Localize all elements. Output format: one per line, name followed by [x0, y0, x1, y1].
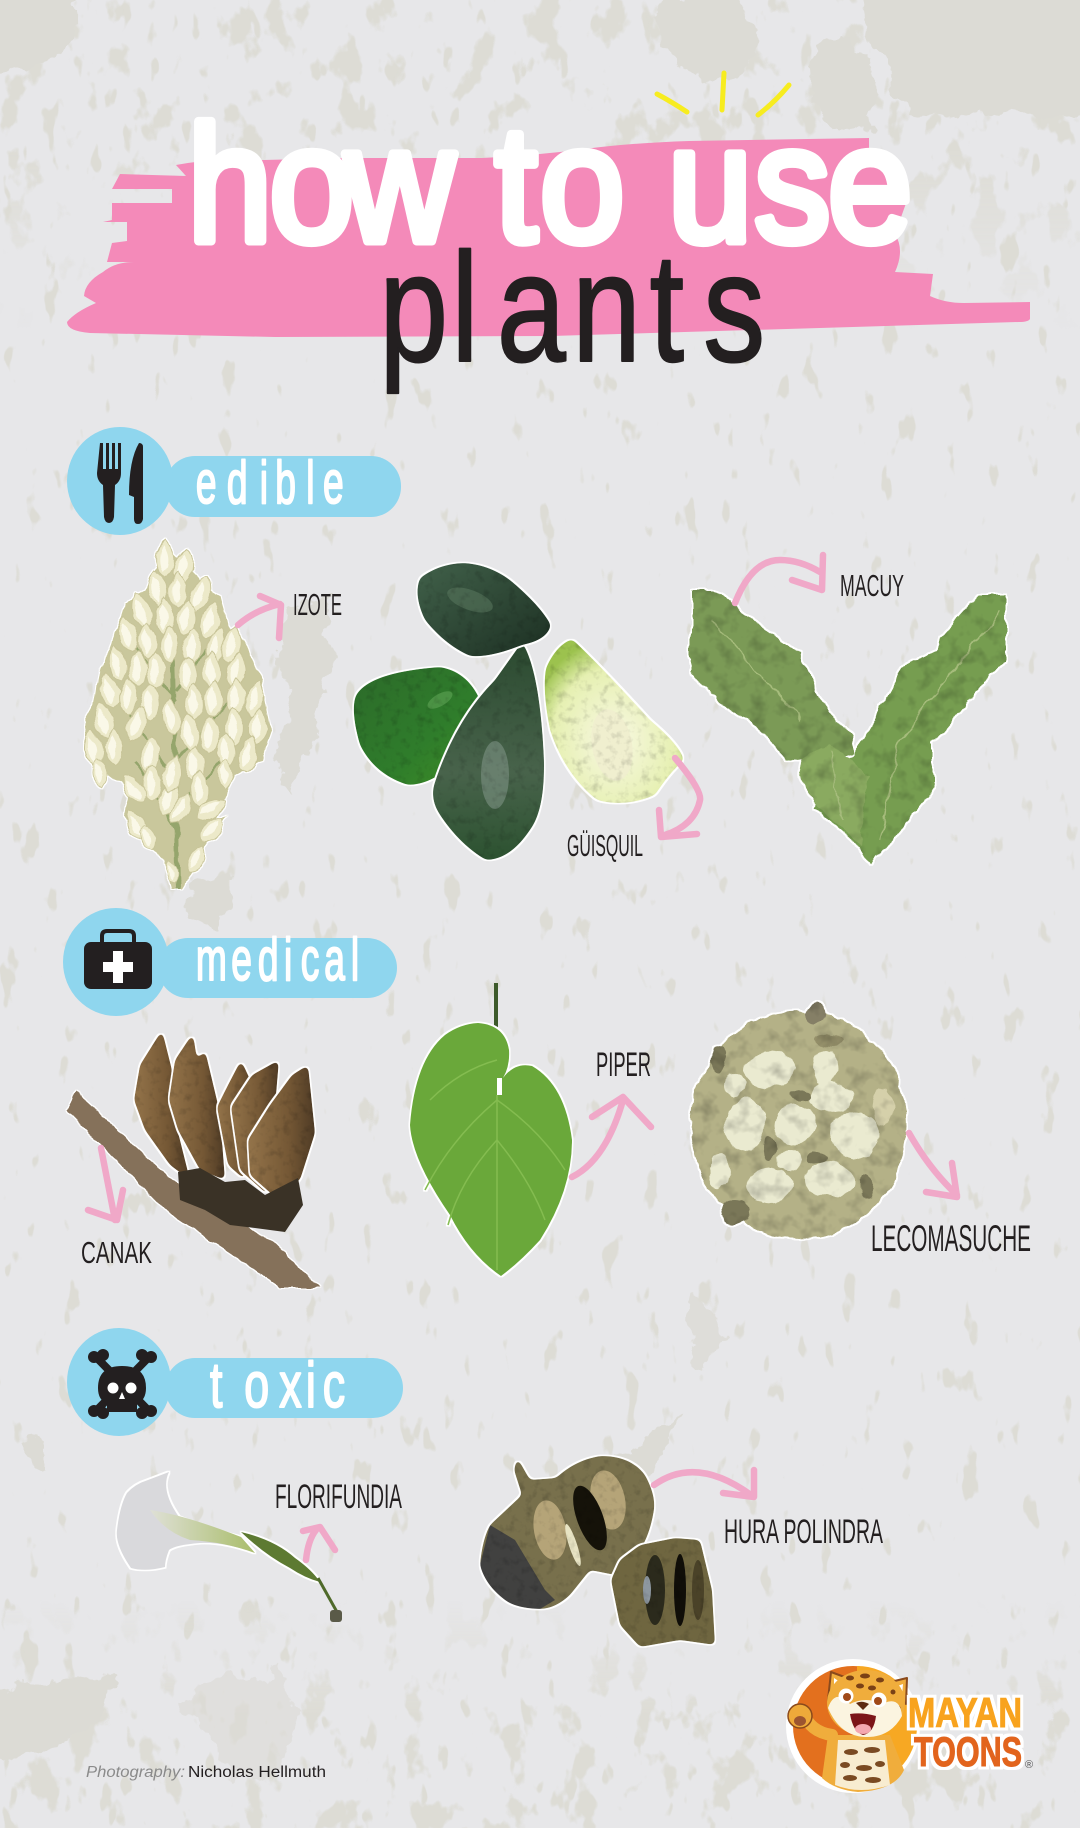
arrow: hura polindra	[654, 1470, 754, 1497]
branch	[67, 1092, 320, 1288]
white trumpet	[117, 1472, 255, 1570]
plant: piper leaf	[410, 983, 572, 1276]
trademark mark: ®	[1025, 1759, 1033, 1771]
title	[67, 73, 1030, 394]
section badge: toxic	[67, 1328, 403, 1436]
centre leaf	[799, 743, 868, 847]
yellow sparkle lines	[657, 73, 789, 115]
left leaf	[691, 590, 854, 762]
icon: fork and knife	[97, 443, 143, 524]
arrow: canak	[88, 1148, 123, 1220]
right leaf	[813, 595, 1006, 866]
long chayote	[433, 642, 544, 860]
photo credit: Nicholas Hellmuth	[188, 1764, 326, 1781]
plant: macuy leaves	[691, 590, 1006, 866]
arrow: guisquil	[659, 758, 700, 837]
plant: florifundia flower	[117, 1472, 342, 1622]
section badge: edible	[67, 427, 401, 535]
arrow: izote	[238, 596, 281, 638]
label: hura polindra: HURA POLINDRA	[724, 1513, 883, 1551]
logo wordmark: TOONS	[914, 1728, 1022, 1775]
stem	[318, 1578, 337, 1612]
leaf notch	[497, 1078, 502, 1095]
logo: mayan toons	[786, 1659, 1033, 1793]
title word: plants: plants	[379, 221, 765, 394]
snail knob	[807, 1001, 825, 1023]
pods	[134, 1030, 190, 1180]
section label: medical: medical	[196, 926, 359, 993]
pod base cluster	[178, 1168, 303, 1232]
green calyx	[241, 1532, 320, 1582]
plant: canak seed pods	[67, 1030, 320, 1288]
section label: edible: edible	[196, 449, 344, 516]
label: canak: CANAK	[81, 1235, 152, 1270]
logo wordmark: MAYAN	[908, 1689, 1022, 1736]
icon: skull and crossbones	[88, 1349, 157, 1419]
label: izote: IZOTE	[293, 587, 342, 622]
label: macuy: MACUY	[840, 568, 904, 603]
logo badge circle	[786, 1659, 920, 1793]
label: guisquil: GÜISQUIL	[567, 828, 643, 863]
green chayote	[354, 667, 482, 785]
fruit two	[611, 1538, 715, 1647]
title word: how to use: how to use	[188, 91, 912, 276]
pink brush stroke	[67, 138, 1030, 337]
fruit one	[480, 1456, 654, 1609]
logo wordmark	[908, 1689, 1022, 1775]
leaf stem	[494, 983, 498, 1028]
plant: lecomasuche disc	[691, 1001, 907, 1239]
plant: hura polyandra fruits	[480, 1456, 715, 1647]
jaguar mascot	[788, 1670, 907, 1792]
label: florifundia: FLORIFUNDIA	[275, 1478, 402, 1516]
arrow: lecomasuche	[909, 1133, 957, 1197]
cut chayote	[545, 639, 684, 803]
dark chayote	[417, 563, 551, 656]
photo credit: Photography:	[86, 1764, 185, 1781]
arrow: piper	[572, 1097, 651, 1177]
section label: toxic: toxic	[210, 1349, 345, 1421]
icon: medical kit	[84, 931, 152, 989]
arrow: florifundia	[303, 1527, 335, 1560]
label: piper: PIPER	[596, 1046, 651, 1084]
arrow: macuy	[735, 555, 823, 603]
plant: izote flower spike	[81, 540, 272, 889]
section badge: medical	[63, 908, 397, 1016]
plant: guisquil chayote fruits	[354, 563, 684, 860]
